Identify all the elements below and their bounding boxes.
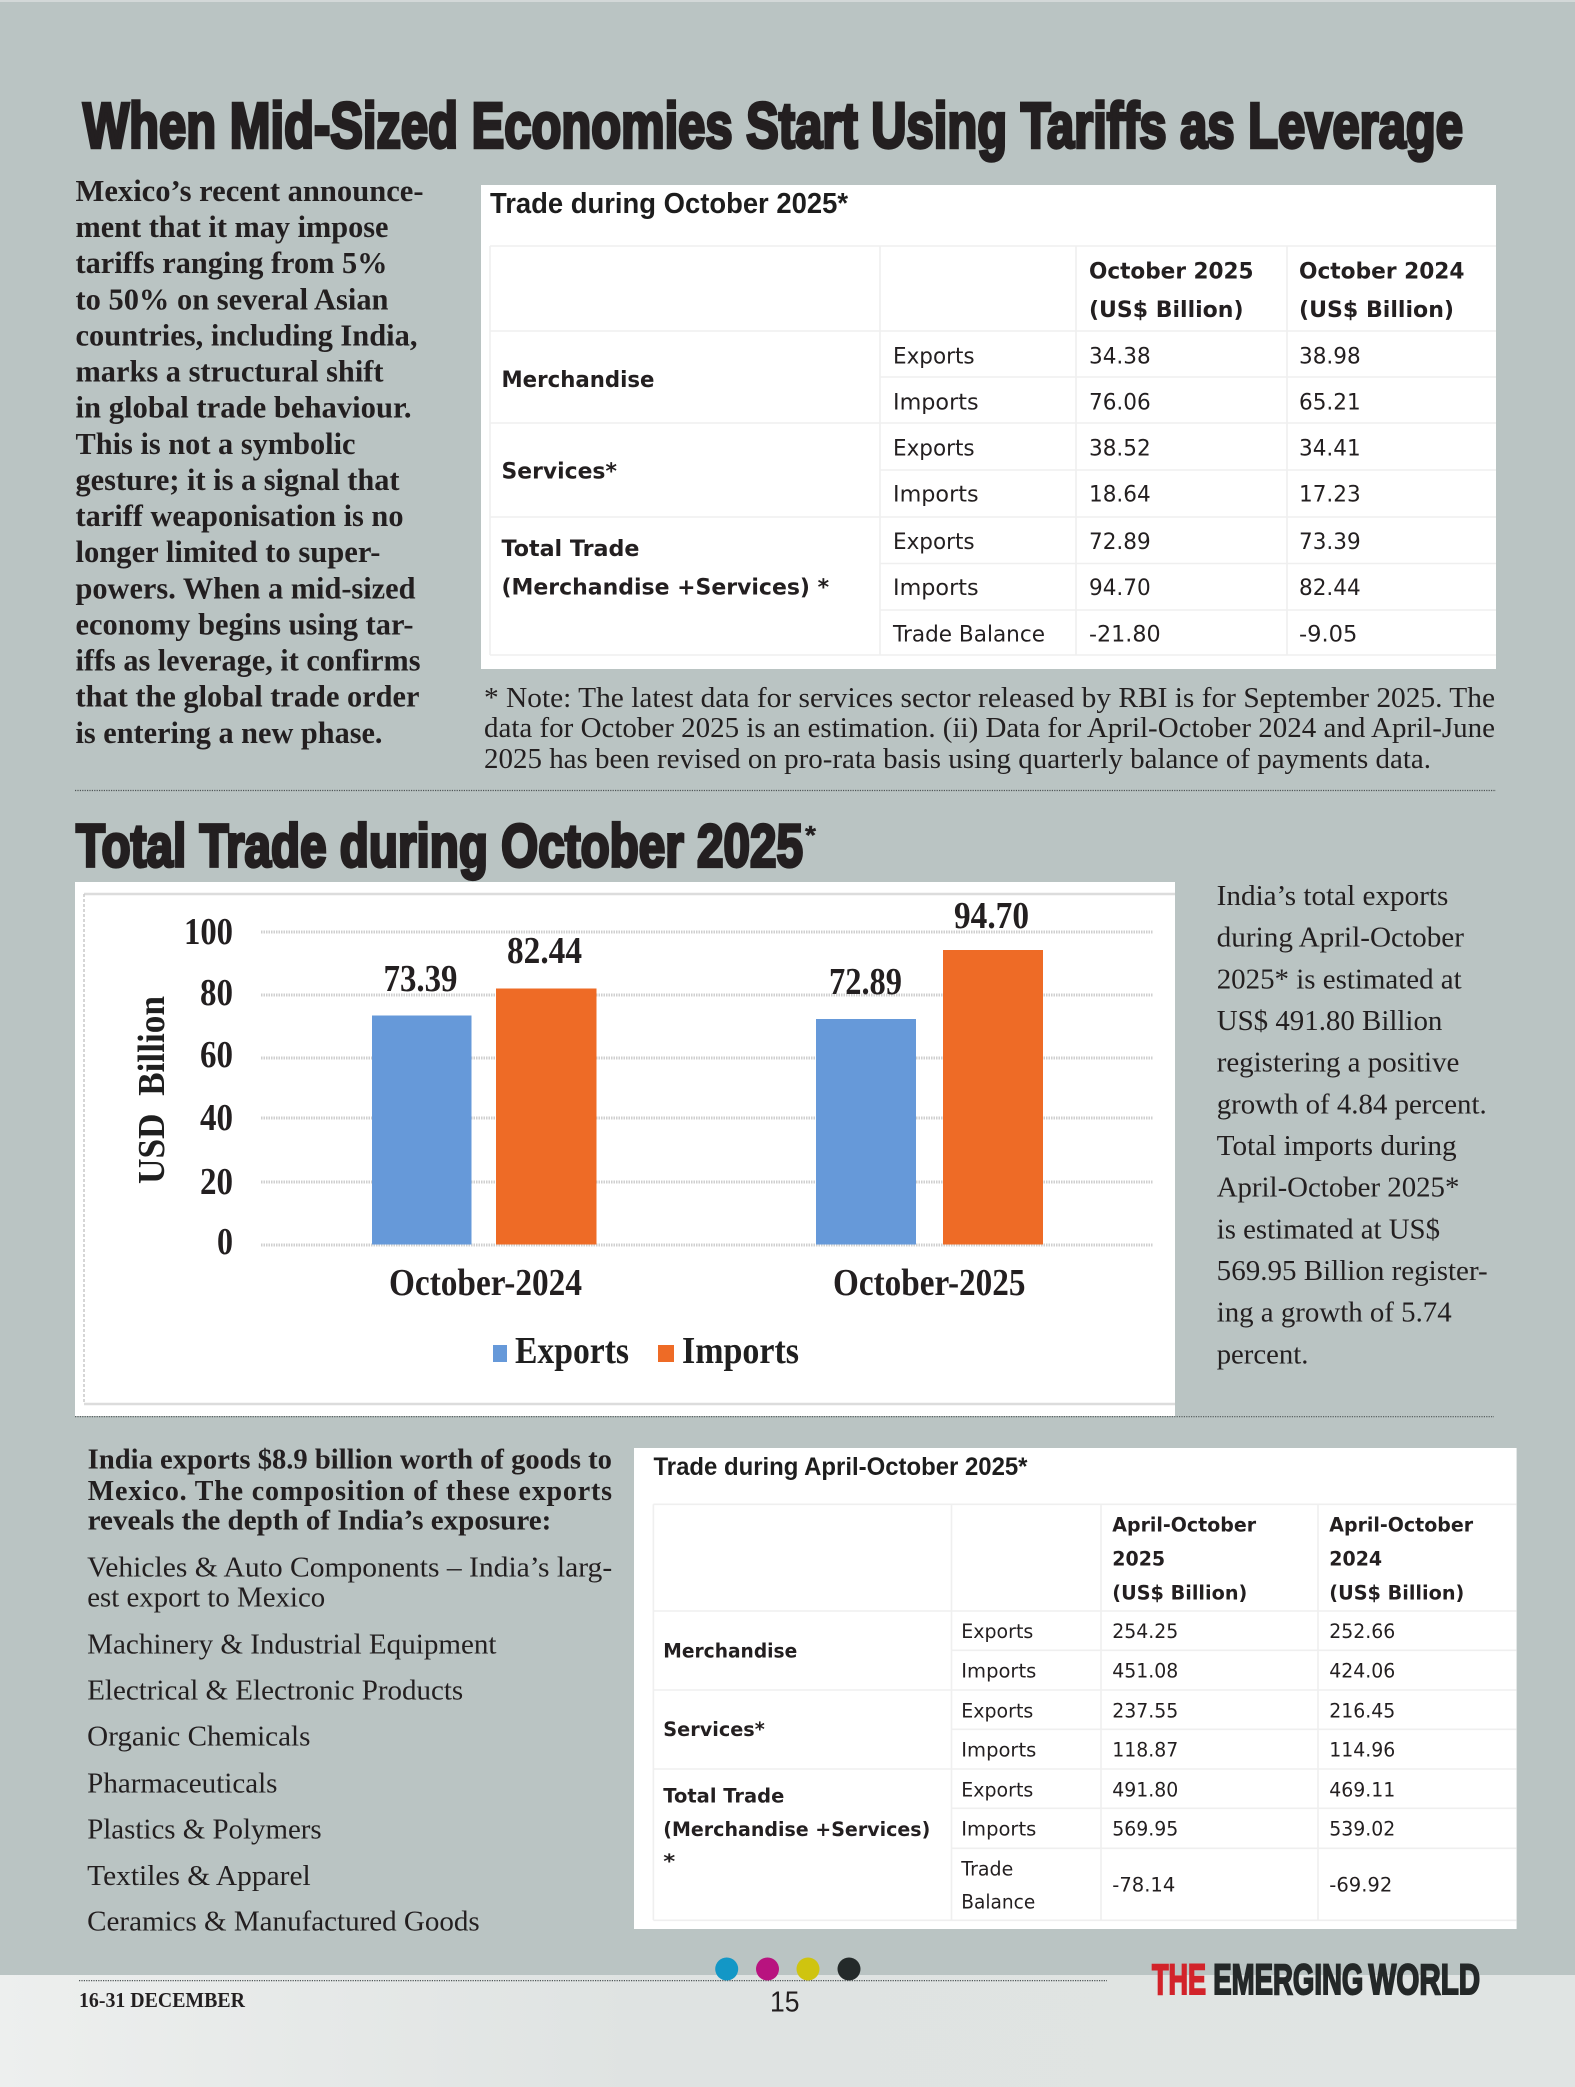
list: export categories: Pharmaceuticals <box>87 1767 278 1799</box>
y axis tick labels: 80 <box>200 972 233 1014</box>
text block: total exports and imports: growth of 4.84 percent. <box>1217 1088 1487 1120</box>
values October 2025: 18.64 <box>1089 482 1151 507</box>
values April-October 2025: 451.08 <box>1112 1660 1178 1683</box>
data labels <box>384 895 1029 1003</box>
text block: total exports and imports <box>1217 880 1488 1370</box>
values April-October 2024: 252.66 <box>1329 1620 1395 1643</box>
heading: total trade: Total Trade during October 2025 <box>76 812 803 880</box>
values October 2024: 38.98 <box>1299 344 1361 369</box>
text block: total exports and imports: percent. <box>1217 1338 1308 1370</box>
row labels: Trade <box>960 1857 1013 1880</box>
values April-October 2024: 469.11 <box>1329 1778 1395 1801</box>
text block: intro paragraph: marks a structural shift <box>76 355 384 389</box>
table header row <box>1089 260 1464 323</box>
text block: table note: * Note: The latest data for services sector released by RBI is for September 2025. The <box>484 682 1495 714</box>
text block: intro paragraph: longer limited to super- <box>76 535 380 569</box>
text block: intro paragraph: tariffs ranging from 5% <box>76 246 388 280</box>
values October 2025: 38.52 <box>1089 436 1151 461</box>
text block: intro paragraph: iffs as leverage, it confirms <box>76 644 421 678</box>
values April-October 2024: 114.96 <box>1329 1739 1395 1762</box>
row group labels: * <box>663 1850 675 1873</box>
data labels: 94.70 <box>954 895 1029 937</box>
table header row <box>1112 1514 1473 1604</box>
text block: total exports and imports: registering a positive <box>1217 1047 1459 1079</box>
y axis tick labels: 20 <box>200 1161 233 1203</box>
table header row: (US$ Billion) <box>1299 298 1454 323</box>
row group labels: Total Trade <box>502 537 640 562</box>
values October 2024 <box>1299 344 1361 647</box>
values October 2024: 73.39 <box>1299 530 1361 555</box>
values October 2025: 72.89 <box>1089 530 1151 555</box>
table header row: (US$ Billion) <box>1089 298 1244 323</box>
footer date: 16-31 DECEMBER <box>79 1988 246 2012</box>
text block: India exports intro: reveals the depth of India’s exposure: <box>88 1505 551 1536</box>
values October 2024: 65.21 <box>1299 390 1361 415</box>
text block: table note: data for October 2025 is an estimation. (ii) Data for April-October 2024 and April-June <box>484 712 1495 744</box>
row group labels: Services* <box>502 460 617 485</box>
values October 2025 <box>1089 344 1161 647</box>
list: export categories: Ceramics & Manufactured Goods <box>87 1905 480 1937</box>
text block: intro paragraph: Mexico’s recent announce- <box>76 174 423 208</box>
text block: total exports and imports: April-October 2025* <box>1217 1172 1459 1204</box>
row labels: Balance <box>961 1890 1035 1913</box>
row labels: Exports <box>893 344 975 369</box>
row labels: Exports <box>893 436 975 461</box>
row labels: Imports <box>961 1818 1036 1841</box>
table header row: October 2024 <box>1299 260 1464 285</box>
y axis tick labels: 60 <box>200 1034 233 1076</box>
y axis tick labels: 40 <box>200 1097 233 1139</box>
text block: total exports and imports: 2025* is estimated at <box>1217 963 1462 995</box>
list: export categories: Vehicles & Auto Components – India’s larg- <box>87 1552 612 1584</box>
row labels: Imports <box>893 390 979 415</box>
heading: total trade: * <box>805 820 817 850</box>
text block: total exports and imports: Total imports during <box>1217 1130 1457 1162</box>
y axis tick labels <box>184 911 233 1263</box>
list: export categories: Plastics & Polymers <box>87 1813 322 1845</box>
text block: total exports and imports: ing a growth of 5.74 <box>1217 1297 1452 1329</box>
page number: 15 <box>770 1987 800 2019</box>
row labels <box>892 344 1045 647</box>
text block: intro paragraph: This is not a symbolic <box>76 427 356 461</box>
row labels: Trade Balance <box>892 622 1045 647</box>
panel: bar chart <box>75 882 1175 1416</box>
table heading: Trade during April-October 2025* <box>654 1453 1028 1481</box>
text block: table note <box>484 682 1495 775</box>
text block: intro paragraph: powers. When a mid-sized <box>76 571 416 605</box>
legend: Imports <box>682 1330 799 1372</box>
data labels: 82.44 <box>507 930 582 972</box>
text block: intro paragraph: that the global trade order <box>76 680 420 714</box>
text block: intro paragraph: is entering a new phase. <box>76 716 382 750</box>
list: export categories: Textiles & Apparel <box>87 1860 311 1892</box>
values April-October 2025: 491.80 <box>1112 1778 1178 1801</box>
table header row: (US$ Billion) <box>1112 1581 1247 1604</box>
table header row: April-October <box>1329 1514 1473 1537</box>
values April-October 2025: 254.25 <box>1112 1620 1178 1643</box>
values October 2025: 94.70 <box>1089 576 1151 601</box>
values October 2024: 82.44 <box>1299 576 1361 601</box>
y axis tick labels: 100 <box>184 911 233 953</box>
legend <box>493 1330 799 1372</box>
text block: total exports and imports: is estimated at US$ <box>1217 1213 1440 1245</box>
text block: intro paragraph: in global trade behaviour. <box>76 391 412 425</box>
values April-October 2024: -69.92 <box>1329 1874 1392 1897</box>
text block: total exports and imports: 569.95 Billion register- <box>1217 1255 1488 1287</box>
values October 2024: 34.41 <box>1299 436 1361 461</box>
x axis labels: October-2025 <box>833 1262 1026 1304</box>
table header row: October 2025 <box>1089 260 1254 285</box>
row group labels <box>502 368 830 600</box>
text block: intro paragraph: economy begins using tar- <box>76 607 414 641</box>
values October 2025: -21.80 <box>1089 622 1161 647</box>
row labels: Imports <box>893 576 979 601</box>
row labels: Imports <box>961 1739 1036 1762</box>
panel: table Trade during April-October 2025 <box>634 1448 1517 1929</box>
values October 2024: -9.05 <box>1299 622 1357 647</box>
text block: table note: 2025 has been revised on pro-rata basis using quarterly balance of payments data. <box>484 743 1431 775</box>
row labels: Exports <box>961 1778 1033 1801</box>
values April-October 2024: 539.02 <box>1329 1818 1395 1841</box>
data labels: 72.89 <box>829 961 902 1003</box>
x axis labels: October-2024 <box>389 1262 582 1304</box>
table header row: 2024 <box>1329 1548 1382 1571</box>
text block: India exports intro: India exports $8.9 billion worth of goods to <box>88 1444 612 1475</box>
list: export categories: est export to Mexico <box>87 1582 325 1614</box>
row group labels: Merchandise <box>663 1639 797 1662</box>
data labels: 73.39 <box>384 958 458 1000</box>
values April-October 2025: 237.55 <box>1112 1699 1178 1722</box>
logo: The Emerging World: WORLD <box>1368 1956 1480 2004</box>
bars October-2024 <box>372 988 596 1244</box>
row labels: Exports <box>961 1620 1033 1643</box>
row labels: Exports <box>961 1699 1033 1722</box>
values April-October 2024: 424.06 <box>1329 1660 1395 1683</box>
table header row: April-October <box>1112 1514 1256 1537</box>
x axis labels <box>389 1262 1026 1304</box>
icon: colour registration dots <box>715 1958 860 1980</box>
text block: intro paragraph: gesture; it is a signal that <box>76 463 400 497</box>
row labels: Imports <box>961 1660 1036 1683</box>
list: export categories: Organic Chemicals <box>87 1721 310 1753</box>
table heading: Trade during October 2025* <box>490 188 849 220</box>
text block: intro paragraph: tariff weaponisation is no <box>76 499 404 533</box>
list: export categories: Machinery & Industrial Equipment <box>87 1628 496 1660</box>
legend: Exports <box>515 1330 629 1372</box>
table header row: (US$ Billion) <box>1329 1581 1464 1604</box>
text block: total exports and imports: during April-October <box>1217 922 1464 954</box>
bars October-2025 <box>816 950 1043 1244</box>
y axis tick labels: 0 <box>217 1221 233 1263</box>
panel: table Trade during October 2025 <box>481 185 1496 669</box>
list: export categories <box>87 1552 612 1937</box>
row group labels: (Merchandise +Services) * <box>502 575 830 600</box>
values April-October 2025: -78.14 <box>1112 1874 1175 1897</box>
values April-October 2025 <box>1112 1620 1178 1897</box>
text block: total exports and imports: India’s total exports <box>1217 880 1448 912</box>
text block: intro paragraph: to 50% on several Asian <box>76 282 389 316</box>
values October 2024: 17.23 <box>1299 482 1361 507</box>
row group labels: Merchandise <box>502 368 654 393</box>
row group labels: Services* <box>663 1718 765 1741</box>
text block: total exports and imports: US$ 491.80 Billion <box>1217 1005 1443 1037</box>
row labels: Exports <box>893 530 975 555</box>
row group labels: Total Trade <box>663 1785 784 1808</box>
text block: intro paragraph <box>76 174 423 750</box>
logo: The Emerging World: EMERGING <box>1213 1956 1363 2004</box>
text block: India exports intro <box>88 1444 612 1536</box>
values April-October 2024: 216.45 <box>1329 1699 1395 1722</box>
table header row: 2025 <box>1112 1548 1165 1571</box>
y axis title: USD Billion <box>131 996 173 1184</box>
list: export categories: Electrical & Electronic Products <box>87 1674 463 1706</box>
values October 2025: 34.38 <box>1089 344 1151 369</box>
values October 2025: 76.06 <box>1089 390 1151 415</box>
values April-October 2024 <box>1329 1620 1395 1897</box>
row group labels <box>663 1639 930 1873</box>
text block: intro paragraph: countries, including India, <box>76 318 418 352</box>
values April-October 2025: 569.95 <box>1112 1818 1178 1841</box>
logo: The Emerging World: THE <box>1152 1956 1206 2004</box>
values April-October 2025: 118.87 <box>1112 1739 1178 1762</box>
text block: intro paragraph: ment that it may impose <box>76 210 388 244</box>
row labels <box>960 1620 1036 1913</box>
row labels: Imports <box>893 482 979 507</box>
text block: India exports intro: Mexico. The composition of these exports <box>88 1476 612 1507</box>
row group labels: (Merchandise +Services) <box>663 1818 930 1841</box>
